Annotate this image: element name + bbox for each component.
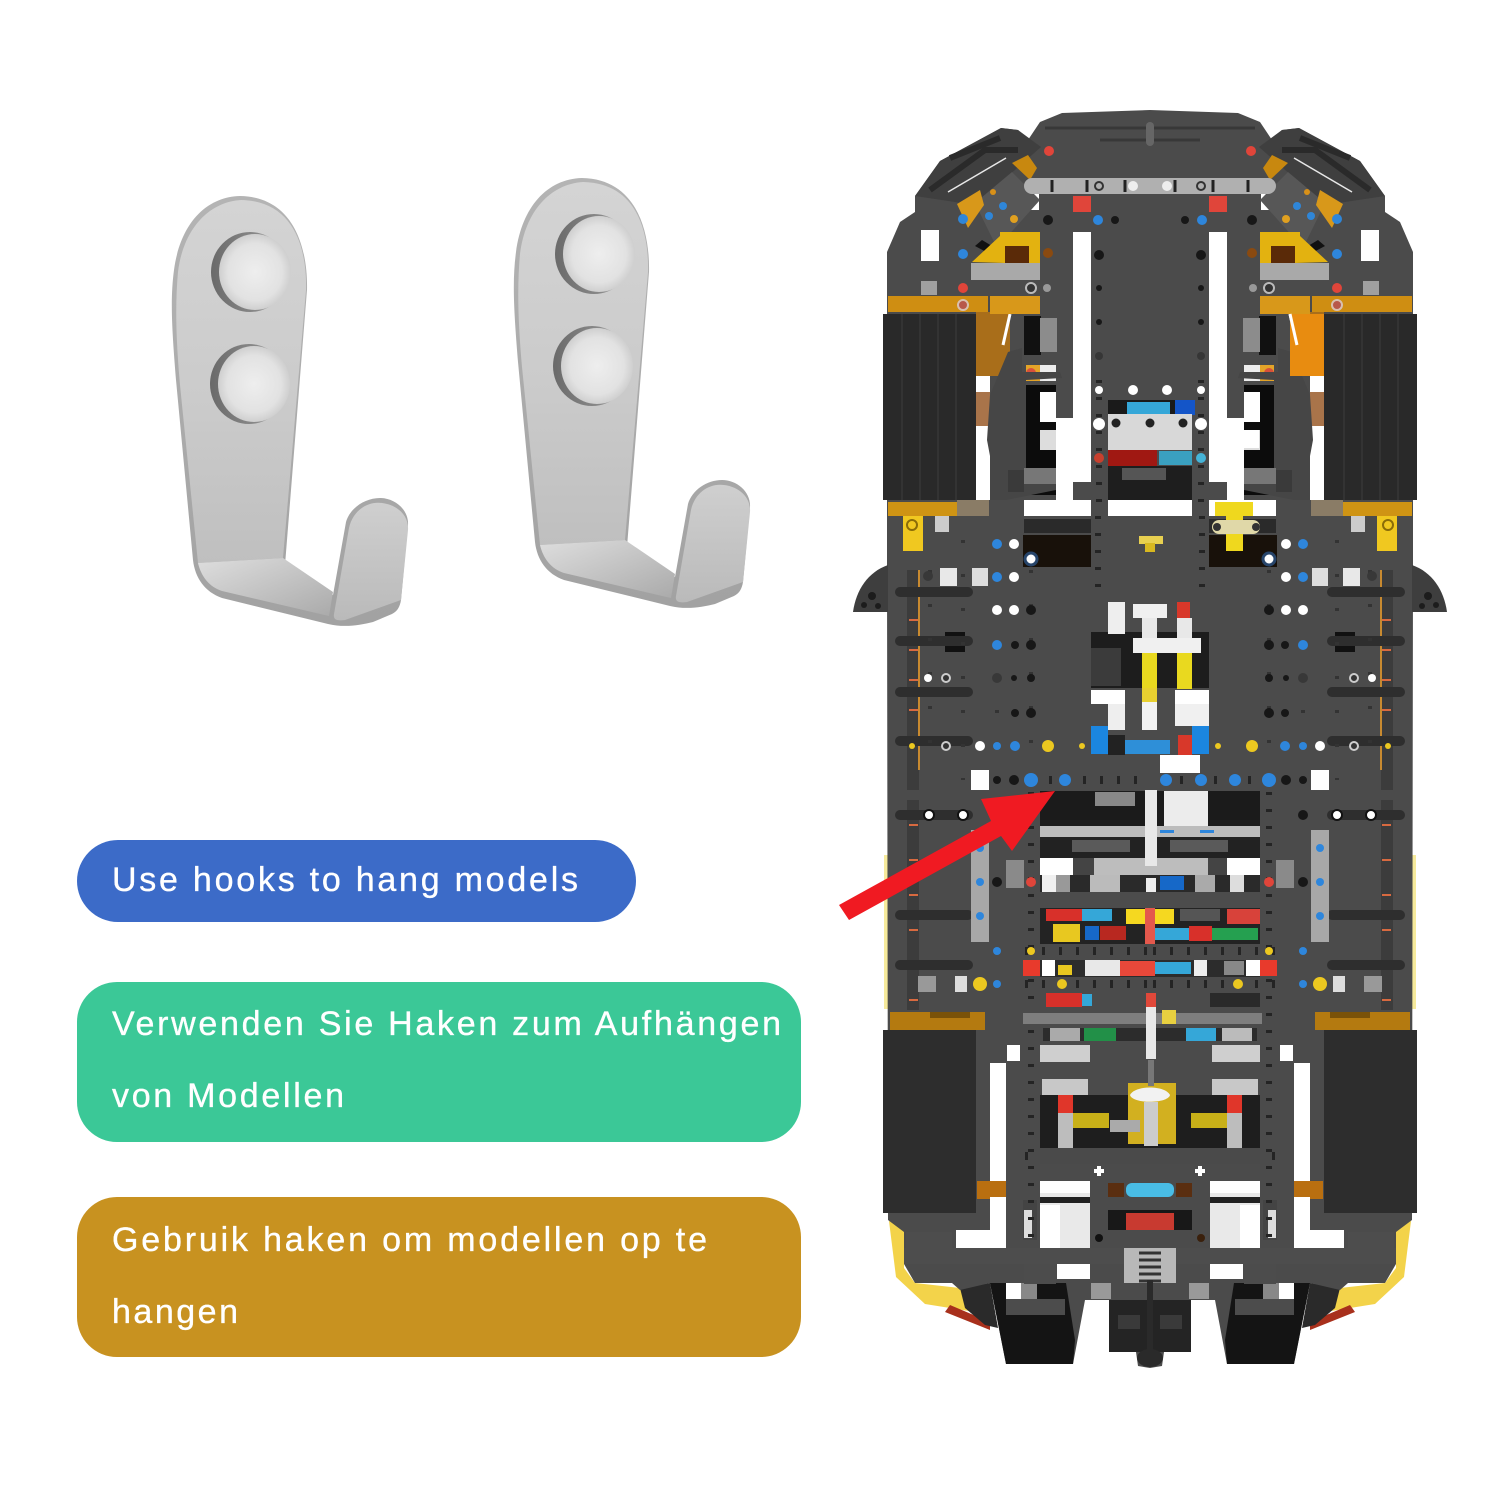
rear wheel: [883, 1030, 976, 1213]
cross pins and cyan joint, rear: [1094, 1166, 1205, 1242]
callout: Dutch label: hangen: [112, 1293, 238, 1331]
model car chassis, underside view: [853, 110, 1447, 1368]
callout: German label: [77, 982, 801, 1142]
suspension spring: [1124, 1248, 1176, 1283]
chassis base silhouette: [887, 110, 1150, 1368]
side fender: [853, 565, 888, 612]
grey strip, rear side: [890, 770, 1024, 1030]
icon: left steel hook: [172, 196, 408, 626]
suspension hub: [976, 348, 1062, 500]
right half of chassis, mirror of left: [1150, 110, 1447, 1368]
gold inner frame, front: [888, 232, 1041, 376]
amber panel, right wheel arch: [1290, 314, 1324, 376]
yellow axle piece: [1139, 502, 1260, 552]
rear bumper beam: [904, 1232, 1150, 1364]
callout: English label: Use hooks to hang models: [112, 861, 578, 899]
beam tick marks: [930, 380, 1150, 1250]
side bricks, mid section: [940, 568, 988, 652]
yellow rear bodywork: [884, 855, 998, 1330]
central frame with gears, front: [1093, 385, 1259, 516]
callout: German label: von Modellen: [112, 1077, 344, 1115]
front cap and grey liftarm: [1024, 126, 1276, 194]
pistons, centre: [1091, 602, 1209, 773]
row of blue holes, centre beam: [1160, 774, 1214, 833]
left half of chassis (mirrored for the right half): [853, 110, 1150, 1368]
callout: Dutch label: Gebruik haken om modellen op te: [112, 1221, 707, 1259]
icon: right steel hook: [514, 178, 750, 608]
callout: German label: Verwenden Sie Haken zum Aufhängen: [112, 1005, 781, 1043]
gold and brown parts, mid front: [888, 500, 1091, 567]
arrow pointing at the hanging slot: [839, 791, 1055, 920]
white and grey bricks, front: [921, 196, 1091, 500]
centre driveshaft: [1130, 790, 1170, 1146]
front corner detail: [915, 128, 1041, 254]
side beam with orange dashes: [900, 570, 968, 1010]
white bricks, rear: [956, 1045, 1090, 1279]
rear tow nub: [1137, 1280, 1163, 1367]
front wheel: [883, 314, 976, 500]
rear gearbox rows: [1023, 791, 1277, 1164]
holes and pins: [909, 146, 1119, 991]
callout: Dutch label: [77, 1197, 801, 1357]
callout: English label: [77, 840, 636, 922]
